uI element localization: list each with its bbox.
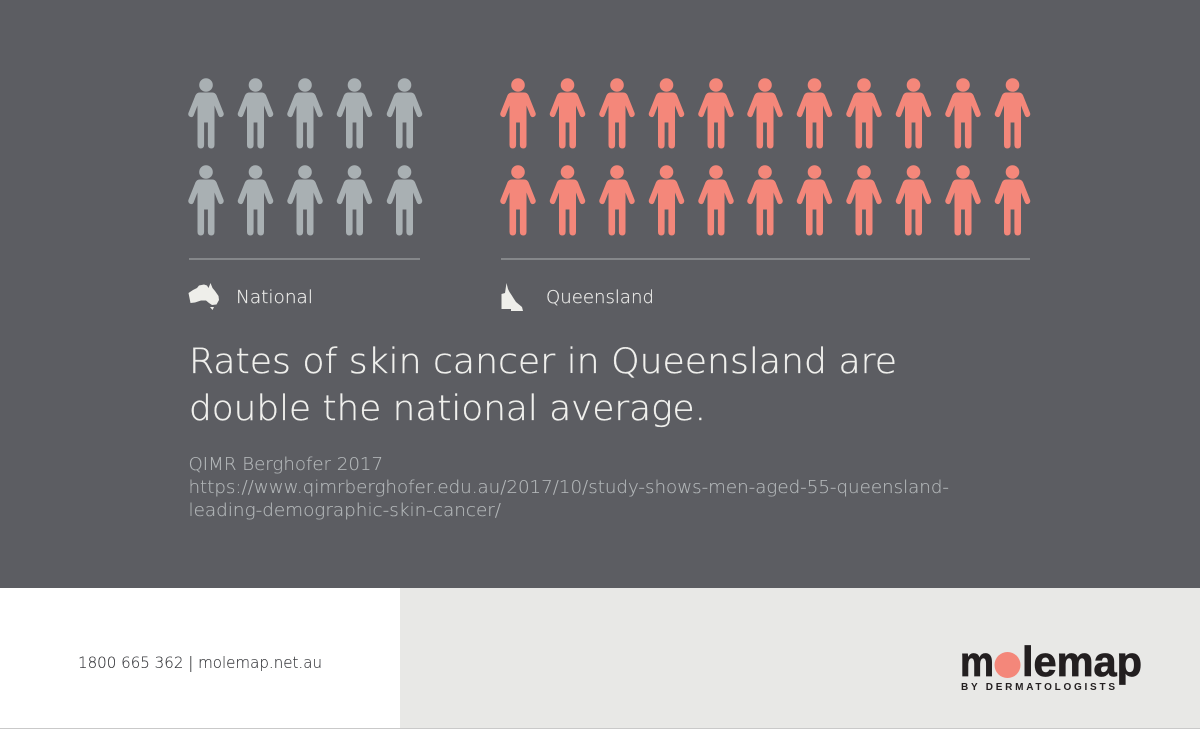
- label: Queensland: Queensland: [546, 288, 654, 308]
- source citation: https://www.qimrberghofer.edu.au/2017/10/study-shows-men-aged-55-queensland-: [188, 477, 949, 498]
- headline: double the national average.: [189, 389, 706, 429]
- molemap logo: m: [960, 638, 994, 685]
- headline: Rates of skin cancer in Queensland are: [189, 342, 897, 382]
- headline: [189, 342, 897, 429]
- source citation: [188, 454, 949, 521]
- icon: map of Queensland: [502, 283, 523, 311]
- footer logo panel: [400, 588, 1200, 729]
- contact details: 1800 665 362 | molemap.net.au: [78, 653, 322, 672]
- icon: map of Australia: [188, 283, 219, 310]
- molemap logo: [960, 638, 1142, 693]
- label: National: National: [236, 288, 313, 308]
- national people pictogram: [188, 78, 422, 236]
- source citation: QIMR Berghofer 2017: [188, 454, 383, 475]
- molemap logo: lemap: [1022, 638, 1142, 685]
- source citation: leading-demographic-skin-cancer/: [188, 500, 501, 521]
- Queensland people pictogram: [500, 78, 1030, 236]
- molemap logo: BY DERMATOLOGISTS: [961, 682, 1115, 693]
- footer contact panel: [0, 588, 400, 729]
